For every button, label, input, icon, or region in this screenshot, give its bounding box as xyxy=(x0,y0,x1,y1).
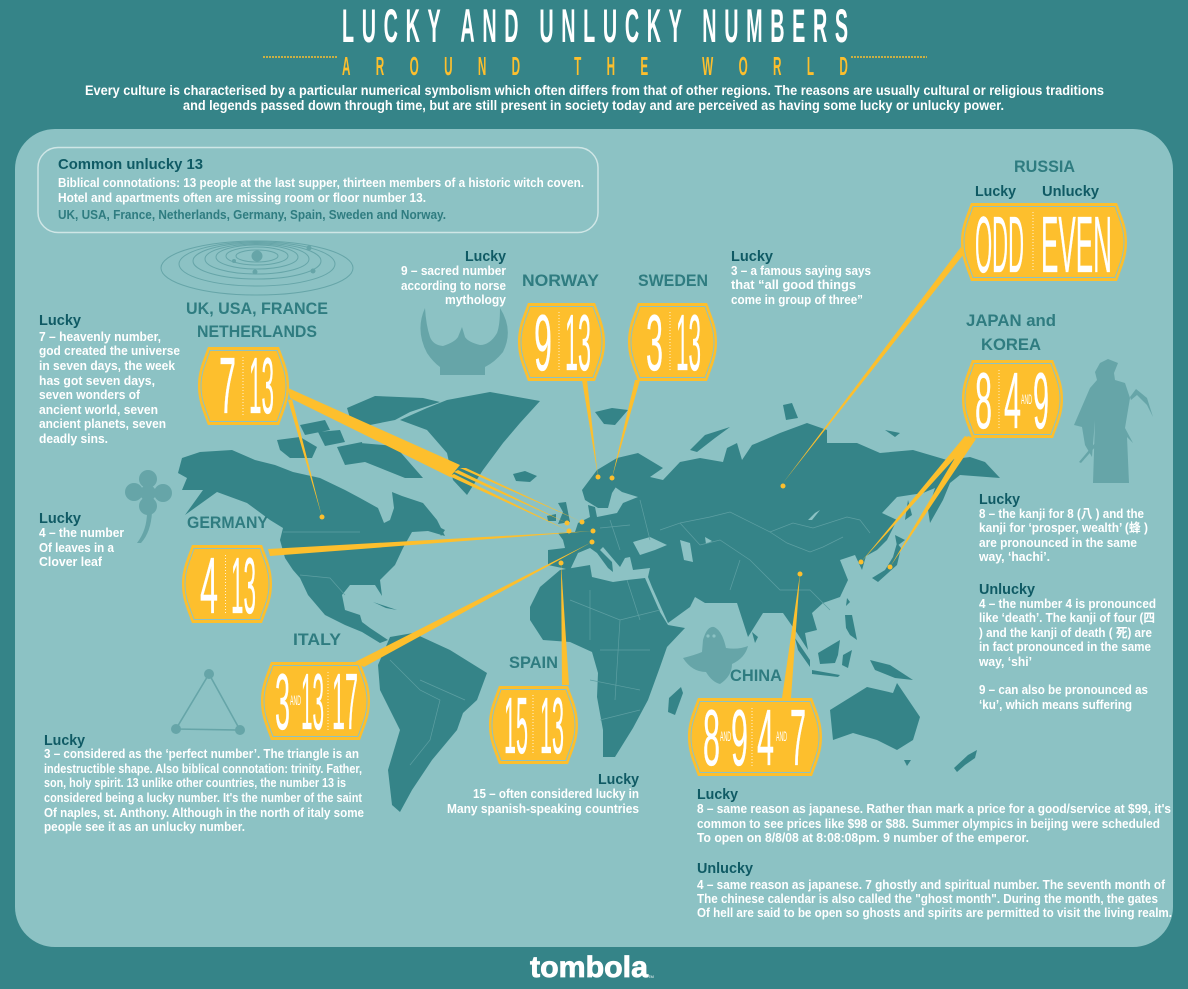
text: Norway lucky: 9 – sacred number xyxy=(401,264,506,278)
badge: Sweden xyxy=(628,298,717,387)
country label: China: CHINA xyxy=(730,666,782,685)
text: 13 xyxy=(676,298,701,387)
badge: Spain: 15 xyxy=(504,681,528,770)
text: Germany lucky 4: Lucky xyxy=(39,510,82,527)
text: Italy lucky: 3 – considered as the ‘perfect number’. The triangle is an xyxy=(44,747,359,761)
badge: China: 4 xyxy=(757,693,774,782)
text: UK lucky 7: in seven days, the week xyxy=(39,359,175,373)
country borders xyxy=(283,500,870,765)
badge: China: AND xyxy=(776,728,787,744)
connector lines xyxy=(268,247,976,698)
text: Japan and Korea lucky and unlucky: Unlucky xyxy=(979,581,1036,598)
text: China lucky and unlucky: Lucky xyxy=(697,786,739,803)
text: Spain lucky xyxy=(447,771,640,816)
text: UK lucky 7 xyxy=(39,312,180,446)
country label: Spain: SPAIN xyxy=(509,653,558,672)
world map xyxy=(178,392,1000,812)
text: Japan and Korea lucky and unlucky: are pronounced in the same xyxy=(979,536,1137,550)
text: Norway lucky: mythology xyxy=(445,293,506,307)
text: Japan and Korea lucky and unlucky: ) and the kanji of death ( 死) are xyxy=(979,626,1152,640)
callout: common unlucky 13: Common unlucky 13 xyxy=(58,156,203,173)
country label: Netherlands: NETHERLANDS xyxy=(197,322,317,341)
callout: common unlucky 13: Biblical connotations: 13 people at the last supper, thirteen members of a historic witch coven. xyxy=(58,176,584,190)
text: Germany lucky 4: Of leaves in a xyxy=(39,541,115,555)
text: 17 xyxy=(332,657,358,746)
badge: China xyxy=(688,693,822,782)
icon: grim reaper xyxy=(1074,359,1153,483)
text: 13 xyxy=(565,298,591,387)
country label: Russia: RUSSIA xyxy=(1014,157,1075,176)
text: Japan and Korea lucky and unlucky: 4 – the number 4 is pronounced xyxy=(979,597,1156,611)
text: Japan and Korea lucky and unlucky: ‘ku’, which means suffering xyxy=(979,698,1132,712)
text: Sweden lucky: Lucky xyxy=(731,248,774,265)
intro text xyxy=(85,83,1104,113)
text: China lucky and unlucky: 8 – same reason as japanese. Rather than mark a price for a good/service at $99, it's xyxy=(697,802,1171,816)
text: China lucky and unlucky xyxy=(697,786,1172,920)
intro text: and legends passed down through time, but are still present in society today and are perceived as having some lucky or unlucky power. xyxy=(183,98,1004,113)
text: Italy lucky xyxy=(44,732,364,834)
text: Italy lucky: Lucky xyxy=(44,732,86,749)
callout: common unlucky 13 xyxy=(38,148,598,232)
badge: Italy: 3 xyxy=(275,657,290,746)
country label: Japan and: JAPAN and xyxy=(966,311,1056,330)
text: 13 xyxy=(231,541,256,630)
text: UK lucky 7: deadly sins. xyxy=(39,432,108,446)
text: UK lucky 7: god created the universe xyxy=(39,344,180,358)
badge: Norway xyxy=(518,298,605,387)
icon: ghost xyxy=(683,627,748,684)
text: Spain lucky: Many spanish-speaking countries xyxy=(447,802,639,816)
text: Italy lucky: people see it as an unlucky number. xyxy=(44,820,245,834)
title: LUCKY AND UNLUCKY NUMBERS xyxy=(342,0,848,52)
badge: China: 8 xyxy=(703,693,720,782)
callout: common unlucky 13: Hotel and apartments often are missing room or floor number 13. xyxy=(58,191,426,205)
badge: Russia: ODD xyxy=(975,200,1024,289)
country label: Korea: KOREA xyxy=(981,335,1041,354)
badge: Norway: 9 xyxy=(534,298,552,387)
text: Japan and Korea lucky and unlucky: kanji for ‘prosper, wealth’ (蜂 ) xyxy=(979,520,1148,535)
badge: Italy: AND xyxy=(290,692,301,708)
subtitle: AROUND THE WORLD xyxy=(342,53,848,81)
text: UK lucky 7: ancient planets, seven xyxy=(39,417,166,431)
country label: Germany: GERMANY xyxy=(187,513,269,532)
text: China lucky and unlucky: common to see prices like $98 or $88. Summer olympics in beijing were scheduled xyxy=(697,817,1160,831)
badge: China: 9 xyxy=(731,693,748,782)
text: Germany lucky 4: Clover leaf xyxy=(39,555,103,569)
badge: Japan and Korea xyxy=(962,356,1063,445)
text: Japan and Korea lucky and unlucky: Lucky xyxy=(979,491,1021,508)
icon: clover xyxy=(125,470,172,543)
icon: viking helmet xyxy=(420,308,508,375)
text: UK lucky 7: 7 – heavenly number, xyxy=(39,330,161,344)
text: Norway lucky: according to norse xyxy=(401,279,506,293)
badge: Italy: 13 xyxy=(301,657,324,746)
text: UK lucky 7: has got seven days, xyxy=(39,374,155,388)
text: Japan and Korea lucky and unlucky: like ‘death’. The kanji of four (四 xyxy=(979,611,1155,625)
logo: tombola: TM xyxy=(648,974,654,979)
Russia lucky heading: Lucky xyxy=(975,183,1017,200)
country label: Sweden: SWEDEN xyxy=(638,271,708,290)
icon: triangle xyxy=(171,669,245,735)
text: Sweden lucky xyxy=(731,248,871,307)
text: China lucky and unlucky: Unlucky xyxy=(697,860,754,877)
text: China lucky and unlucky: To open on 8/8/08 at 8:08:08pm. 9 number of the emperor. xyxy=(697,831,1029,845)
text: Spain lucky: 15 – often considered lucky in xyxy=(473,787,639,801)
intro text: Every culture is characterised by a particular numerical symbolism which often differs from that of other regions. The reasons are usually cultural or religious traditions xyxy=(85,83,1104,98)
text: Japan and Korea lucky and unlucky xyxy=(978,491,1156,712)
text: Spain lucky: Lucky xyxy=(598,771,640,788)
country label: UK, USA, France: UK, USA, FRANCE xyxy=(186,299,328,318)
text: Norway lucky xyxy=(401,248,507,307)
text: Germany lucky 4: 4 – the number xyxy=(39,526,124,540)
text: Sweden lucky: come in group of three” xyxy=(731,293,863,307)
text: Germany lucky 4 xyxy=(39,510,124,569)
country label: Italy: ITALY xyxy=(293,630,342,649)
text: Japan and Korea lucky and unlucky: 9 – can also be pronounced as xyxy=(979,683,1148,697)
Russia unlucky heading: Unlucky xyxy=(1042,183,1100,200)
text: UK lucky 7: Lucky xyxy=(39,312,82,329)
text: Italy lucky: Of naples, st. Anthony. Although in the north of italy some xyxy=(44,806,364,820)
badge: Sweden: 3 xyxy=(646,298,663,387)
badge: China: AND xyxy=(720,728,731,744)
text: Norway lucky: Lucky xyxy=(465,248,507,265)
text: 13 xyxy=(540,681,564,770)
text: UK lucky 7: seven wonders of xyxy=(39,388,141,402)
badge: UK USA France Netherlands xyxy=(198,341,289,430)
badge: UK USA France Netherlands: 7 xyxy=(219,341,236,430)
badge: China: 7 xyxy=(790,693,806,782)
text: Japan and Korea lucky and unlucky: way, ‘hachi’. xyxy=(978,550,1050,564)
badge: Germany: 4 xyxy=(200,541,218,630)
text: 13 xyxy=(249,341,274,430)
text: Sweden lucky: that “all good things xyxy=(731,278,856,292)
text: Italy lucky: considered being a lucky number. It's the number of the saint xyxy=(44,791,363,805)
logo: tombola: tombola xyxy=(530,951,648,984)
badge: Japan and Korea: 8 xyxy=(975,356,992,445)
text: Sweden lucky: 3 – a famous saying says xyxy=(731,264,871,278)
text: Japan and Korea lucky and unlucky: 8 – the kanji for 8 (八 ) and the xyxy=(979,507,1144,521)
text: China lucky and unlucky: The chinese calendar is also called the "ghost month". During the month, the gates xyxy=(697,892,1158,906)
text: China lucky and unlucky: 4 – same reason as japanese. 7 ghostly and spiritual number. The seventh month of xyxy=(697,878,1166,892)
badge: Japan and Korea: 9 xyxy=(1033,356,1049,445)
text: UK lucky 7: ancient world, seven xyxy=(39,403,158,417)
badge: Italy xyxy=(261,657,370,746)
badge: Japan and Korea: AND xyxy=(1021,391,1032,407)
callout: common unlucky 13: UK, USA, France, Netherlands, Germany, Spain, Sweden and Norway. xyxy=(58,208,446,222)
country label: Norway: NORWAY xyxy=(522,271,600,290)
text: Japan and Korea lucky and unlucky: in fact pronounced in the same xyxy=(979,640,1151,654)
text: Italy lucky: son, holy spirit. 13 unlike other countries, the number 13 is xyxy=(44,776,346,790)
badge: Germany xyxy=(182,541,272,630)
icon: solar system xyxy=(161,241,353,295)
badge: Japan and Korea: 4 xyxy=(1004,356,1021,445)
text: Japan and Korea lucky and unlucky: way, ‘shi’ xyxy=(978,655,1032,669)
text: Italy lucky: indestructible shape. Also biblical connotation: trinity. Father, xyxy=(44,762,362,776)
